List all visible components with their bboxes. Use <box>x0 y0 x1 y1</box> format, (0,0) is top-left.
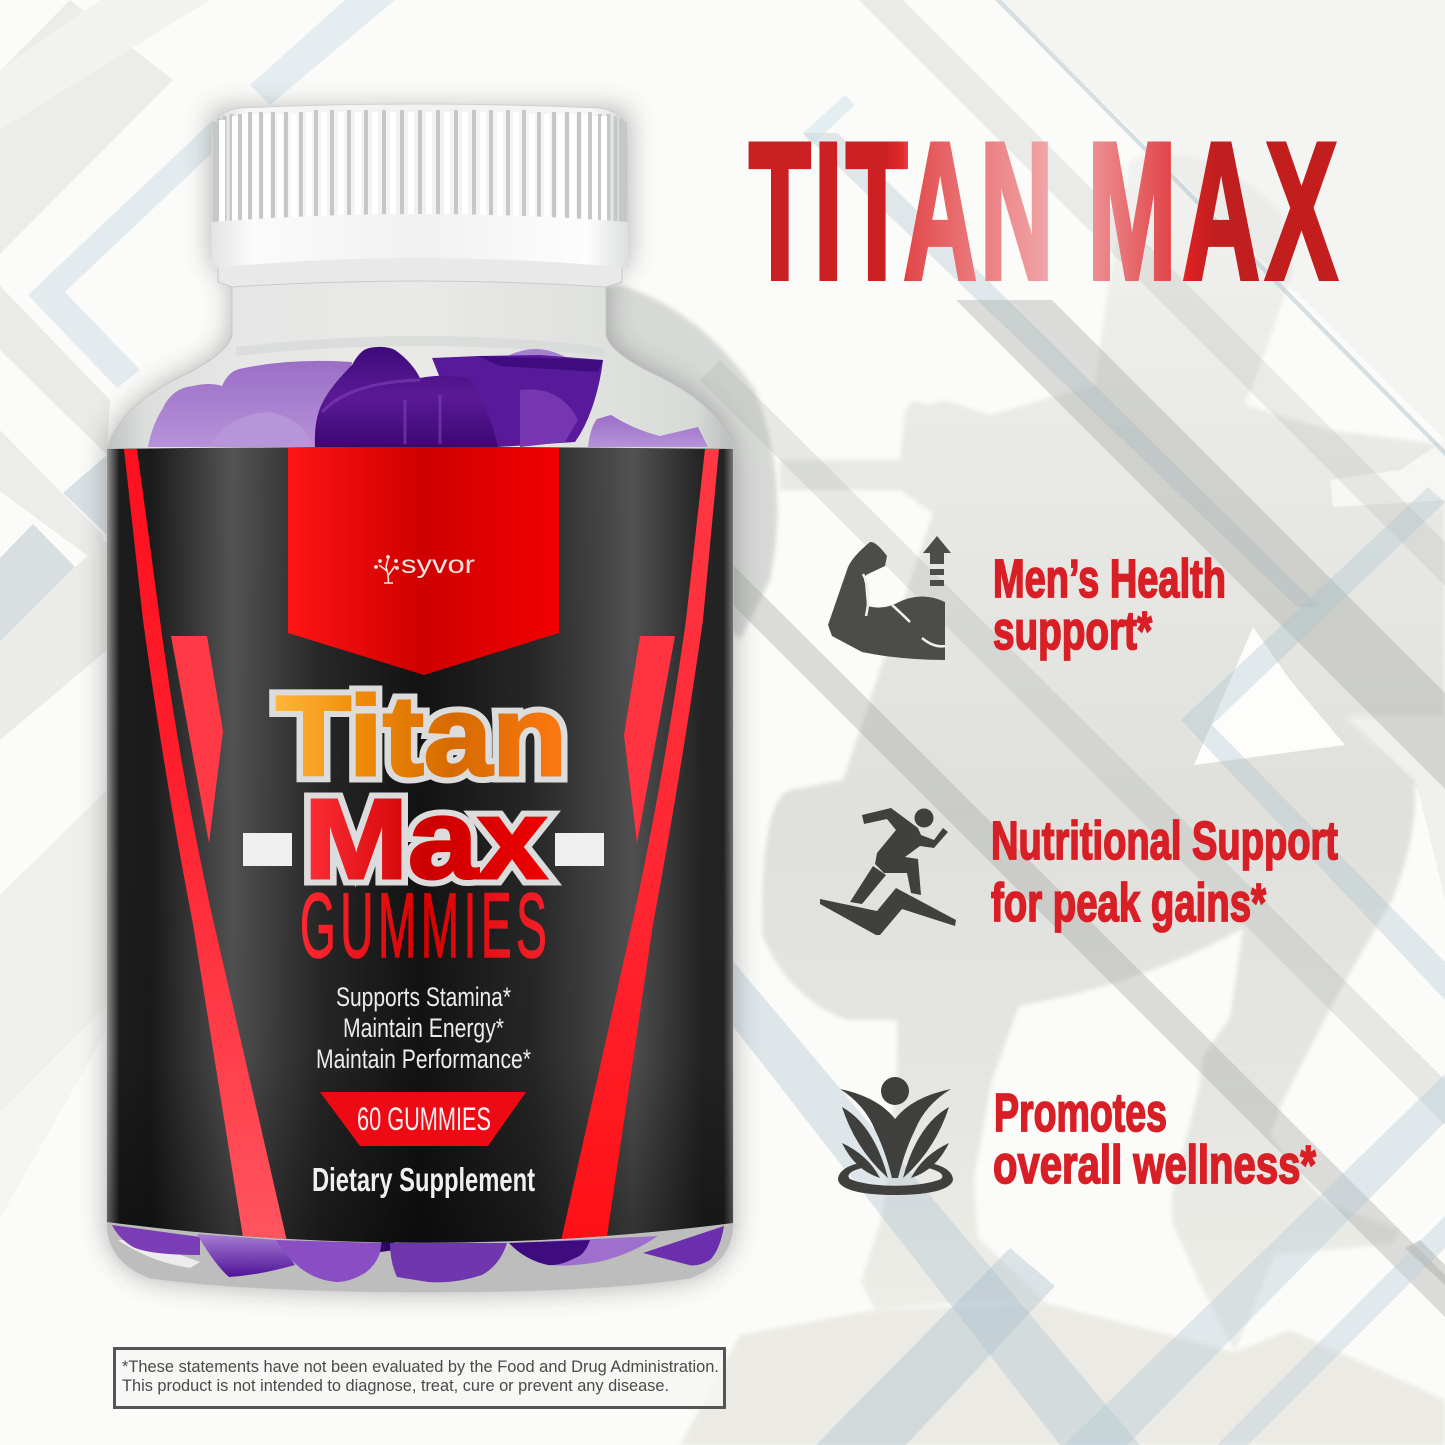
bottle drop shadow <box>107 110 733 1292</box>
label benefits: Maintain Energy* <box>343 1013 504 1043</box>
icon: flexed arm <box>828 536 951 660</box>
glass body <box>107 268 733 1292</box>
product name: Max: Max <box>304 776 547 902</box>
gummies bottom <box>112 1225 724 1282</box>
disclaimer box <box>114 1348 724 1408</box>
cap <box>211 104 628 268</box>
gummies top <box>148 347 708 447</box>
brand logo <box>374 551 475 583</box>
silhouette of athlete <box>762 154 1445 1352</box>
label benefits <box>318 986 531 1068</box>
icon: brand tree <box>374 555 399 583</box>
text: Men’s Health <box>993 549 1226 609</box>
dietary supplement: Dietary Supplement <box>312 1161 535 1198</box>
product name: Titan: Titan <box>276 673 567 799</box>
benefit: overall wellness <box>838 1077 1316 1195</box>
text: for peak gains* <box>991 873 1266 933</box>
red pennant <box>288 447 559 675</box>
label benefits: Supports Stamina* <box>336 982 511 1012</box>
diagonal bands over the silhouette <box>700 0 1445 1445</box>
icon: wellness figure <box>838 1077 953 1195</box>
title: TITAN <box>749 102 1057 319</box>
count badge <box>320 1092 526 1146</box>
icon: runner <box>820 808 956 935</box>
gap under arm <box>1194 627 1345 765</box>
count badge: 60 GUMMIES <box>357 1101 491 1137</box>
cap ribs <box>215 110 625 224</box>
product name: Titan: Titan <box>276 673 567 799</box>
red side stripes <box>124 449 289 1250</box>
bottle label <box>107 445 733 1260</box>
text: support* <box>993 601 1152 661</box>
brand logo: syvor <box>401 551 475 579</box>
product name: Max: Max <box>304 776 547 902</box>
text: overall wellness* <box>993 1135 1316 1195</box>
text <box>993 1083 1316 1195</box>
cap band <box>211 214 628 268</box>
product name: GUMMIES: GUMMIES <box>300 875 551 977</box>
benefit: nutritional support <box>820 808 1338 935</box>
text: Promotes <box>994 1083 1167 1143</box>
right pale wash <box>1000 0 1445 440</box>
product name: Max <box>304 792 562 888</box>
disclaimer box: This product is not intended to diagnose, treat, cure or prevent any disease. <box>122 1377 669 1395</box>
bottle <box>107 104 733 1292</box>
disclaimer box: *These statements have not been evaluated by the Food and Drug Administration. <box>122 1358 719 1376</box>
label benefits: Maintain Performance* <box>316 1044 531 1074</box>
neck rims <box>218 255 622 287</box>
barbell plate behind bottle <box>530 285 777 640</box>
benefit: mens health <box>828 536 1226 661</box>
text <box>993 549 1226 661</box>
glass base tone <box>107 1222 733 1292</box>
white side bars <box>243 833 604 866</box>
title: MAX <box>1088 103 1343 320</box>
text <box>991 811 1338 933</box>
left geometric bands <box>0 0 395 1218</box>
floor shadow <box>680 1303 1445 1445</box>
title <box>749 102 1343 320</box>
